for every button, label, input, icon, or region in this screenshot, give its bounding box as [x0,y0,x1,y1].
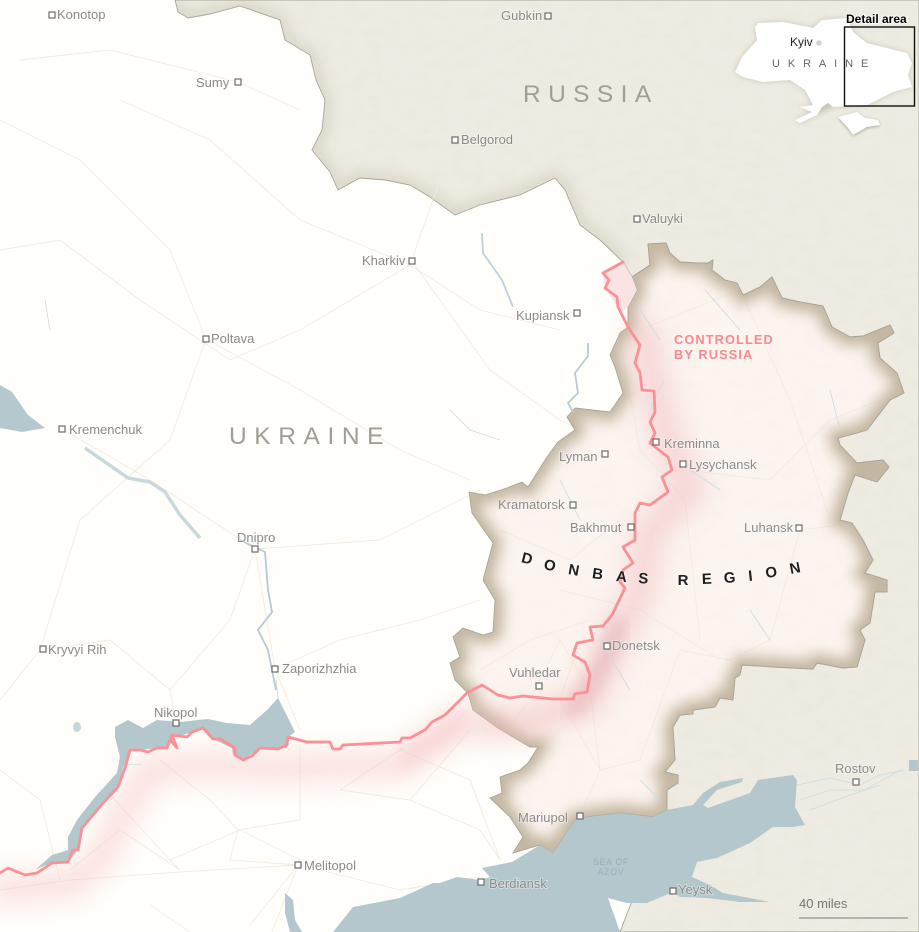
city: Donetsk: Donetsk [612,638,660,653]
kakhovka reservoir [35,698,295,870]
russia label: RUSSIA [523,81,659,108]
inset: ukraine silhouette [735,18,912,123]
city: Lyman: Lyman [559,449,598,464]
city: Sumy: Sumy [196,75,230,90]
kremenchuk reservoir and dnipro [0,385,45,432]
water: rivers and reservoirs [0,233,918,932]
controlled by russia label: CONTROLLED [674,332,774,347]
city: Kharkiv: Kharkiv [362,253,406,268]
city: Nikopol: Nikopol [154,705,197,720]
city: Berdiansk: Berdiansk [489,876,547,891]
inset: detail area label: Detail area [846,12,907,26]
city: Mariupol: Mariupol [518,810,568,825]
molochna lagoon [285,893,302,932]
controlled by russia label: BY RUSSIA [674,347,753,362]
inset: crimea [838,112,880,135]
scale bar [799,896,908,918]
front line [0,262,672,875]
city: Belgorod: Belgorod [461,132,513,147]
oskil and other rivers [482,233,513,307]
inset: detail area box [844,27,914,106]
city: Rostov [835,761,876,785]
donbas region label: DONBASREGION [520,549,802,589]
don delta [797,770,905,810]
city: Vuhledar: Vuhledar [509,665,561,680]
ukraine label: UKRAINE [229,423,391,450]
city: Kremenchuk: Kremenchuk [69,422,142,437]
inset: kyiv marker: Kyiv [790,35,813,49]
city: Melitopol: Melitopol [304,858,356,873]
city: Dnipro [237,530,275,552]
city: Kryvyi Rih: Kryvyi Rih [48,642,107,657]
city: Lysychansk: Lysychansk [689,457,757,472]
city: Gubkin: Gubkin [501,8,542,23]
inset: ukraine label: UKRAINE [772,58,876,70]
city: Kreminna: Kreminna [664,436,720,451]
donbas region area [450,242,904,854]
sea of azov [333,775,805,932]
city: Yeysk: Yeysk [678,882,713,897]
city: Kupiansk: Kupiansk [516,308,570,323]
sea of azov label: AZOV [598,867,624,877]
city: Rostov: Rostov [835,761,876,776]
city: Luhansk: Luhansk [744,520,794,535]
locator inset map [735,12,914,135]
scale bar: 40 miles [799,896,848,911]
controlled by russia shading [0,262,690,890]
city: Valuyki: Valuyki [642,211,683,226]
city: Zaporizhzhia: Zaporizhzhia [282,661,357,676]
city: Dnipro: Dnipro [237,530,275,545]
road network, ukraine [0,50,600,932]
sea of azov label: SEA OF [593,857,629,867]
city: Konotop: Konotop [57,7,105,22]
city: Bakhmut: Bakhmut [570,520,622,535]
city: Vuhledar [509,665,561,689]
city: Poltava: Poltava [211,331,255,346]
inset: ukraine silhouette shadow [735,18,912,123]
city: Kramatorsk: Kramatorsk [498,497,565,512]
